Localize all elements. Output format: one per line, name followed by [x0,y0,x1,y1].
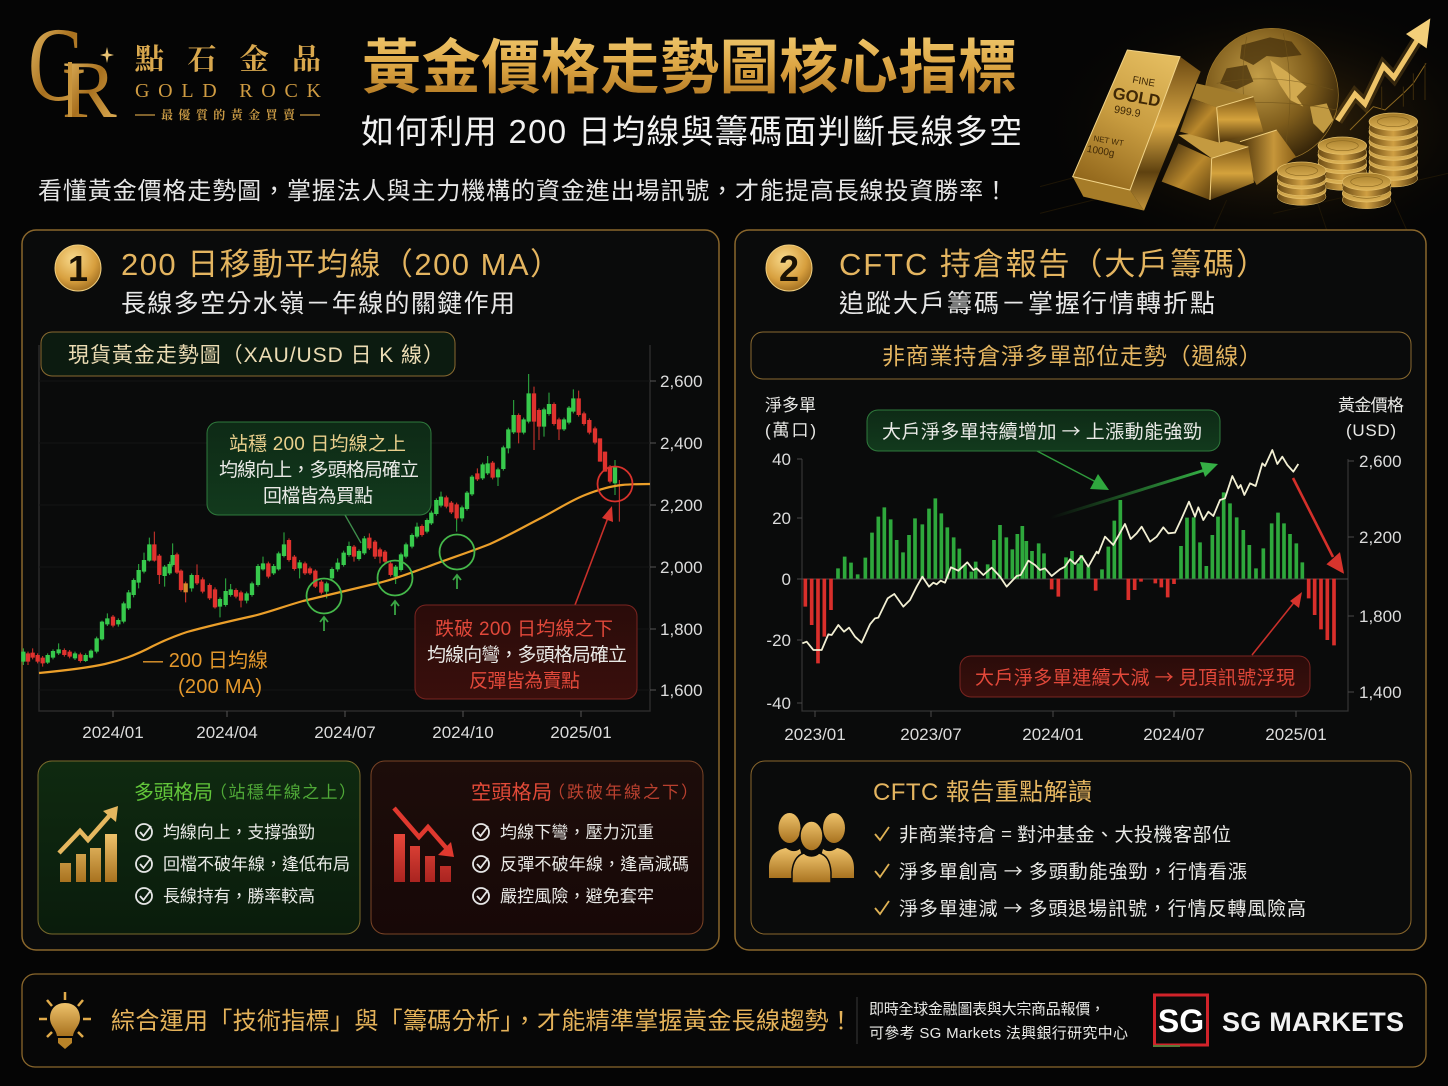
chart heading [41,332,455,376]
logo monogram: R [62,44,117,135]
icon: globe [1205,28,1338,162]
left axis title: 淨多單 [765,396,816,415]
price axis: 1,600 [660,681,703,700]
icon: large fine-gold bar: 999.9 [1113,104,1141,120]
bearish qualifier: （跌破年線之下） [548,783,698,802]
key points list: 淨多單連減 → 多頭退場訊號，行情反轉風險高 [899,894,1306,921]
box: CFTC key points [751,761,1411,934]
reference note: 可參考 SG Markets 法興銀行研究中心 [869,1025,1128,1042]
key points list: 非商業持倉 = 對沖基金、大投機客部位 [899,820,1231,847]
net long bars right [1088,492,1334,645]
divider [856,997,858,1044]
bullish qualifier: （站穩年線之上） [210,783,356,802]
date axis: 2024/10 [432,723,494,742]
box: bearish [371,761,703,934]
logo: SG Markets: SG [1158,1003,1204,1039]
badge 1 [55,245,101,291]
right axis title [1338,396,1404,440]
logo: SG Markets [1153,995,1404,1046]
callout: below 200 MA: 均線向彎，多頭格局確立 [427,644,627,666]
candlestick chart [23,345,703,742]
icon: large fine-gold bar [1073,50,1201,211]
price axis: 2,200 [660,496,703,515]
price axis: 1,800 [660,620,703,639]
panel heading: 200 日移動平均線（200 MA） [121,247,561,282]
breakdown circle [598,466,632,502]
date axis: 2025/01 [1265,725,1327,744]
date axis [784,725,1327,744]
callout: below 200 MA [415,605,637,699]
bearish list: 嚴控風險，避免套牢 [500,887,654,906]
right axis values: 2,600 [1359,452,1402,471]
chart heading [751,332,1411,379]
panel subheading: 追蹤大戶籌碼－掌握行情轉折點 [839,290,1215,318]
net long bars left [805,498,1081,663]
callout: above 200 MA: 站穩 200 日均線之上 [229,433,406,455]
panel subheading: 長線多空分水嶺－年線的關鍵作用 [121,290,515,318]
callout: net long rising: 大戶淨多單持續增加 → 上漲動能強勁 [882,417,1202,444]
date axis: 2023/01 [784,725,846,744]
bearish list: 反彈不破年線，逢高減碼 [500,855,689,874]
callout: below 200 MA: 跌破 200 日均線之下 [435,618,613,640]
200-day moving average line [39,484,650,673]
arrow: to breakdown [575,506,613,605]
left axis values: 20 [772,509,791,528]
intro text: 看懂黃金價格走勢圖，掌握法人與主力機構的資金進出場訊號，才能提高長線投資勝率！ [38,178,1008,205]
panel: CFTC [735,230,1426,950]
big green arrow [1050,462,1218,518]
right axis values [1359,452,1402,702]
callout: net long falling: 大戶淨多單連續大減 → 見頂訊號浮現 [975,663,1295,690]
icon: large fine-gold bar: NET WT [1093,134,1124,148]
logo: Gold Rock [28,7,322,135]
icon: light bulb [39,992,91,1049]
left axis values: 40 [772,450,791,469]
subtitle: 如何利用 200 日均線與籌碼面判斷長線多空 [361,113,1022,150]
icon: large fine-gold bar: 1000g [1086,144,1115,160]
logo english name: GOLD ROCK [135,80,322,102]
bullish list: 均線向上，支撐強勁 [163,823,315,842]
logo: SG Markets: SG MARKETS [1222,1007,1404,1037]
big red arrow [1293,478,1342,571]
bullish list: 長線持有，勝率較高 [163,887,315,906]
bullish list: 回檔不破年線，逢低布局 [163,855,350,874]
icon: rising arrow [1337,18,1430,130]
right axis title: (USD) [1346,421,1396,440]
left axis values [766,450,791,713]
hero illustration: gold bars, globe, coins and rising arrow [1040,0,1448,230]
price axis: 2,000 [660,558,703,577]
left axis values: -40 [766,694,791,713]
left axis title [765,396,816,440]
MA legend: — 200 日均線 [143,649,268,672]
support circles [306,534,474,631]
bearish list: 均線下彎，壓力沉重 [500,823,654,842]
date axis: 2024/01 [82,723,144,742]
small red arrow [1252,592,1302,655]
left axis values: -20 [766,631,791,650]
date axis: 2023/07 [900,725,962,744]
logo monogram [28,7,117,135]
icon: stacked bars [1162,83,1296,200]
icon: people [769,813,854,883]
price axis: 2,600 [660,372,703,391]
chart heading: 非商業持倉淨多單部位走勢（週線） [882,343,1262,369]
candles 2024-2025 [369,374,619,584]
chart heading: 現貨黃金走勢圖（XAU/USD 日 K 線） [68,344,444,367]
right axis values: 2,200 [1359,528,1402,547]
badge 1: 1 [68,248,88,289]
icon: large fine-gold bar: FINE [1131,75,1156,90]
footer message: 綜合運用「技術指標」與「籌碼分析」，才能精準掌握黃金長線趨勢！ [111,1008,853,1035]
price axis: 2,400 [660,434,703,453]
icon: falling bars [394,808,454,882]
badge 2: 2 [779,248,799,289]
date axis: 2024/07 [1143,725,1205,744]
bearish heading: 空頭格局 [471,781,552,804]
net long chart [765,396,1404,744]
date axis: 2025/01 [550,723,612,742]
left axis title: (萬口) [765,421,816,440]
panel heading: CFTC 持倉報告（大戶籌碼） [839,247,1267,282]
title: 黃金價格走勢圖核心指標 [362,20,1017,105]
right axis values: 1,800 [1359,607,1402,626]
logo monogram: G [28,7,86,124]
price axis [660,372,703,700]
callout pointer green [345,515,361,543]
date axis: 2024/04 [196,723,258,742]
key points list [875,820,1306,921]
footer banner [22,974,1426,1067]
logo tagline: 最優質的黃金買賣 [161,107,297,122]
bullish list [136,823,350,906]
icon: large fine-gold bar: GOLD [1111,84,1162,111]
callout pointer: rising [1037,451,1109,490]
MA legend [143,649,268,698]
candles 2024 [23,532,364,667]
icon: coin stacks [1277,113,1418,209]
badge 2 [766,245,812,291]
callout: below 200 MA: 反彈皆為賣點 [469,670,580,692]
bullish heading: 多頭格局 [134,781,213,804]
reference note: 即時全球金融圖表與大宗商品報價， [869,1001,1105,1018]
box: bullish [38,761,360,934]
logo wordmark: 點石金品 [135,43,321,76]
key points list: 淨多單創高 → 多頭動能強勁，行情看漲 [899,857,1247,884]
date axis [82,723,612,742]
right axis title: 黃金價格 [1338,396,1404,415]
date axis: 2024/07 [314,723,376,742]
MA legend: (200 MA) [178,676,262,698]
right axis values: 1,400 [1359,683,1402,702]
reference note [869,1001,1128,1042]
callout: above 200 MA [207,422,431,515]
callout: net long rising [867,410,1220,451]
callout: above 200 MA: 均線向上，多頭格局確立 [219,459,419,481]
callout: net long falling [960,656,1310,697]
date axis: 2024/01 [1022,725,1084,744]
icon: rising bars [59,806,118,882]
bearish list [473,823,689,906]
panel: 200 MA [22,230,719,950]
key points heading: CFTC 報告重點解讀 [873,779,1092,806]
callout: above 200 MA: 回檔皆為買點 [263,485,373,507]
gold price line [802,450,1298,650]
left axis values: 0 [782,570,791,589]
